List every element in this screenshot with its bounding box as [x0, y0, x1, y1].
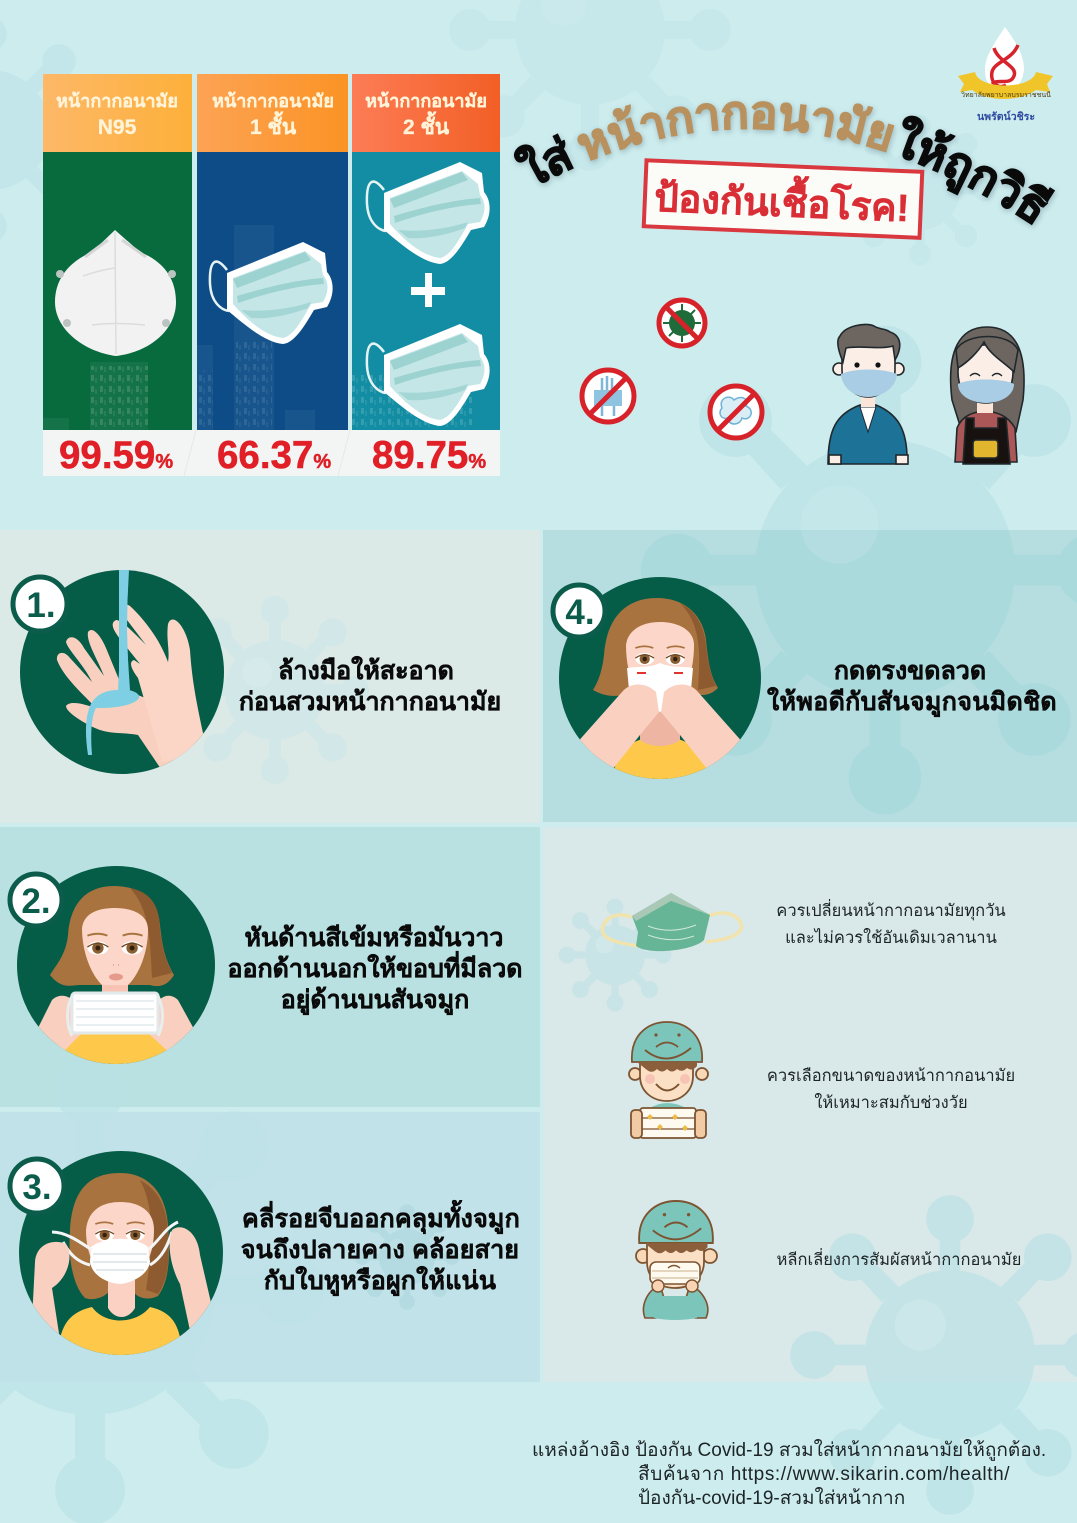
text: step 1: ก่อนสวมหน้ากากอนามัย: [239, 688, 501, 716]
icon: child touching mask: [636, 1201, 717, 1320]
text: tip 1: และไม่ควรใช้อันเดิมเวลานาน: [785, 928, 997, 947]
badge 3: [10, 1159, 64, 1213]
percent row: 66.37%: [217, 434, 331, 477]
logo: นพรัตน์วชิระ: [977, 110, 1035, 123]
stamp: prevent disease: [644, 160, 922, 238]
title: ใส่: [512, 133, 576, 188]
text: step 1: ล้างมือให้สะอาด: [278, 655, 454, 685]
icon: upper mask: [367, 162, 490, 264]
text: step 3: จนถึงปลายคาง คล้อยสาย: [241, 1236, 519, 1264]
text: step 4: กดตรงขดลวด: [834, 657, 986, 685]
title: หน้ากากอนามัย: [576, 100, 897, 164]
text: step 4: ให้พอดีกับสันจมูกจนมิดชิด: [767, 686, 1057, 718]
badge 2: 2.: [21, 882, 51, 921]
icon: surgical mask: [210, 242, 333, 344]
icon: N95 mask: [55, 230, 176, 356]
percent row: 89.75%: [372, 434, 486, 477]
illustration: woman pressing nose wire: [559, 577, 761, 790]
illustration: woman holding mask: [17, 866, 215, 1070]
comparison table: [43, 74, 500, 477]
icon: green mask: [602, 893, 741, 951]
column: 2 layers: 2 ชั้น: [403, 111, 450, 139]
text: tip 2: ให้เหมาะสมกับช่วงวัย: [814, 1093, 968, 1112]
panel: step 2: [0, 827, 540, 1107]
text: step 3: กับใบหูหรือผูกให้แน่น: [264, 1265, 496, 1297]
badge 2: [10, 874, 62, 926]
text: step 2: อยู่ด้านบนสันจมูก: [281, 986, 469, 1016]
column: 2 layers: หน้ากากอนามัย: [365, 91, 487, 111]
percent row: 99.59%: [59, 434, 173, 477]
text: step 2: ออกด้านนอกให้ขอบที่มีลวด: [228, 951, 522, 983]
text: step 3: คลี่รอยจีบออกคลุมทั้งจมูก: [242, 1199, 520, 1235]
text: tip 1: ควรเปลี่ยนหน้ากากอนามัยทุกวัน: [776, 899, 1006, 921]
panel: step 1: [0, 530, 540, 823]
badge 4: [553, 585, 605, 637]
text: step 2: หันด้านสีเข้มหรือมันวาว: [245, 924, 503, 952]
column: 1 layer: 1 ชั้น: [250, 111, 297, 139]
logo: วิทยาลัยพยาบาลบรมราชชนนี: [961, 91, 1051, 99]
column: N95: หน้ากากอนามัย: [56, 91, 178, 111]
badge 3: 3.: [22, 1168, 52, 1207]
panel: step 4: [543, 530, 1077, 822]
stamp: prevent disease: ป้องกันเชื้อโรค!: [654, 170, 910, 230]
column: N95: N95: [98, 116, 137, 139]
badge 4: 4.: [565, 593, 595, 632]
panel: step 3: [0, 1112, 540, 1382]
badge 1: 1.: [26, 586, 56, 625]
column: 2 layers: [352, 74, 500, 430]
illustration: man with mask: [828, 324, 908, 464]
badge 1: [13, 577, 67, 631]
icon: child holding mask: [629, 1022, 708, 1138]
icon: plus: [411, 273, 445, 307]
icon: no germs: [710, 386, 762, 438]
title: ให้ถูกวิธี: [901, 115, 1058, 228]
text: tip 2: ควรเลือกขนาดของหน้ากากอนามัย: [767, 1067, 1015, 1085]
column: N95: [43, 74, 192, 430]
illustration: washing hands: [20, 570, 225, 775]
reference text: สืบค้นจาก https://www.sikarin.com/health/: [638, 1464, 1010, 1485]
title: [512, 100, 1058, 228]
text: tip 3: หลีกเลี่ยงการสัมผัสหน้ากากอนามัย: [777, 1248, 1021, 1269]
percent row: [43, 430, 500, 477]
illustration: woman with mask: [951, 327, 1024, 464]
reference text: แหล่งอ้างอิง ป้องกัน Covid-19 สวมใส่หน้ากากอนามัยให้ถูกต้อง.: [532, 1439, 1046, 1461]
icon: no touching mask: [582, 370, 634, 422]
reference text: ป้องกัน-covid-19-สวมใส่หน้ากาก: [638, 1487, 905, 1509]
logo: [958, 27, 1053, 123]
illustration: woman putting on mask: [19, 1151, 223, 1360]
icon: no virus: [659, 300, 705, 346]
column: 1 layer: [197, 74, 348, 430]
icon: lower mask: [367, 324, 490, 426]
panel: tips: [543, 827, 1077, 1382]
column: 1 layer: หน้ากากอนามัย: [212, 91, 334, 111]
